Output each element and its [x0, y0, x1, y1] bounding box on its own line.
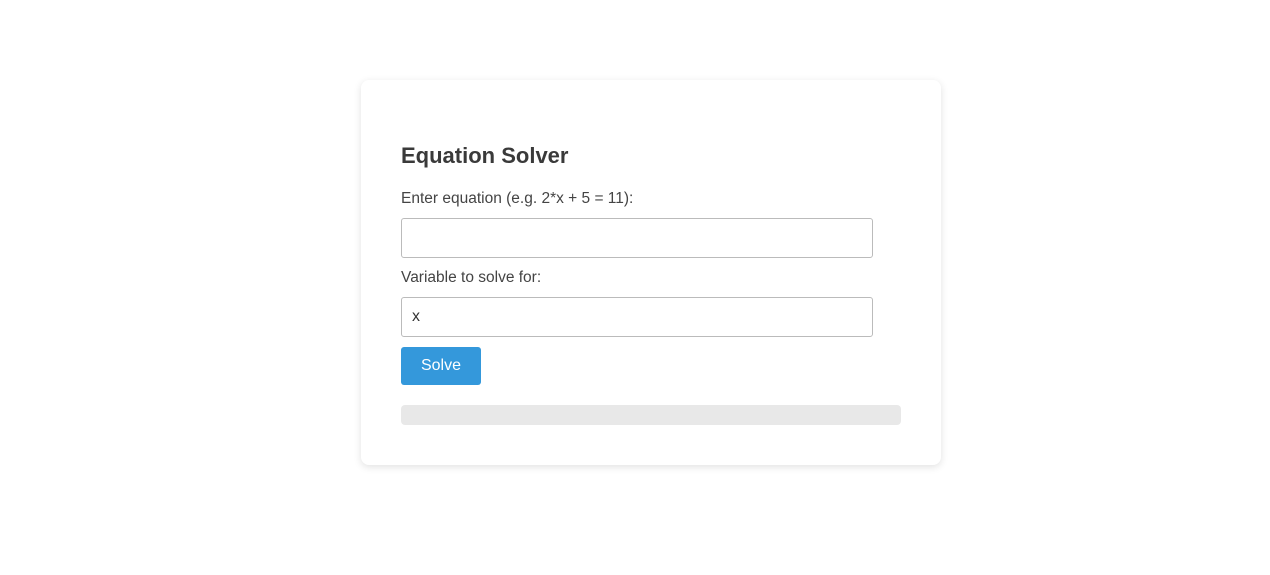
button: solve: Solve	[421, 357, 461, 374]
result bar	[401, 405, 901, 425]
button: solve	[401, 347, 481, 385]
input: equation	[401, 218, 873, 258]
title: Equation Solver	[401, 143, 568, 168]
label: variable: Variable to solve for:	[401, 269, 541, 286]
panel: solver card	[361, 80, 941, 465]
input: variable: x	[412, 308, 420, 325]
input: variable	[401, 297, 873, 337]
label: equation: Enter equation (e.g. 2*x + 5 = 11):	[401, 190, 633, 207]
